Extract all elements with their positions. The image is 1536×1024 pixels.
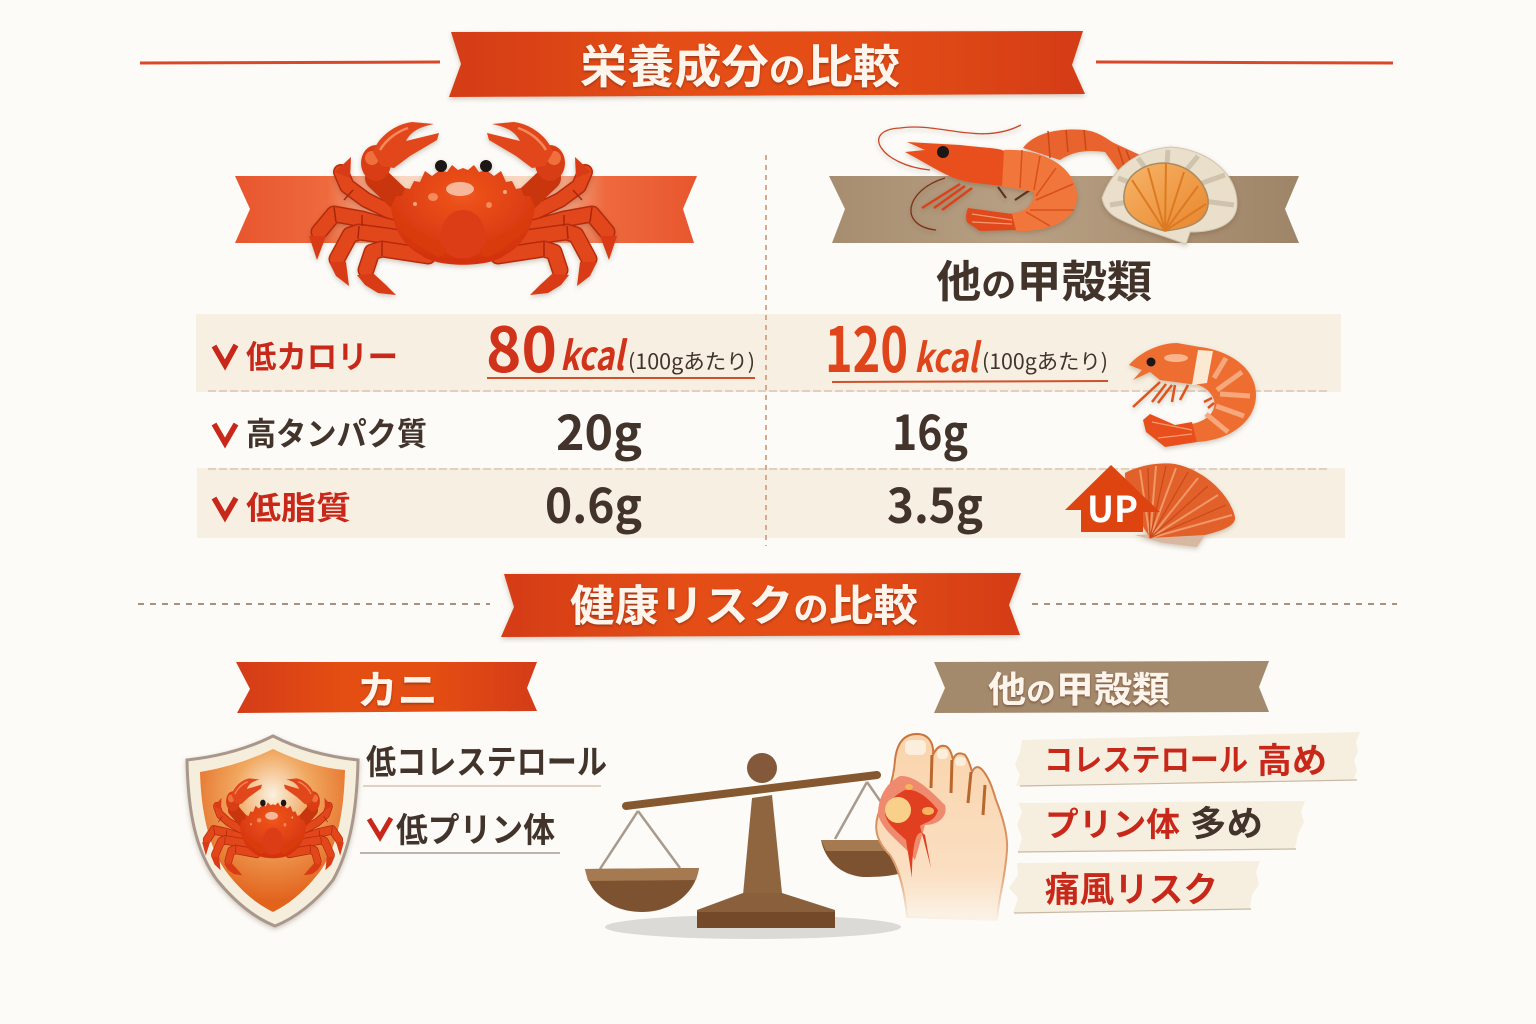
label: low calorie: 低カロリー bbox=[246, 332, 398, 378]
ribbon: crab bbox=[235, 176, 697, 243]
value: other calories bbox=[825, 300, 1108, 390]
tape: high cholesterol bbox=[1015, 732, 1360, 786]
value: other calories: 120 bbox=[825, 300, 908, 390]
value: other calories: kcal bbox=[914, 326, 982, 384]
heading: other crustaceans: 他の甲殻類 bbox=[936, 246, 1152, 310]
tape: high cholesterol: 高め bbox=[1257, 733, 1327, 784]
label: high protein: 高タンパク質 bbox=[246, 409, 427, 455]
icon: balance scale bbox=[585, 753, 905, 939]
value: crab protein: 20g bbox=[556, 394, 642, 464]
icon: large scallop bbox=[1102, 147, 1237, 244]
icon: crab shield bbox=[187, 736, 358, 926]
tape: more purine bbox=[1017, 796, 1305, 852]
check: low fat bbox=[214, 498, 236, 517]
banner: other crustaceans bbox=[934, 661, 1269, 713]
text: low purine: 低プリン体 bbox=[396, 803, 555, 852]
tape: gout risk bbox=[1009, 861, 1260, 913]
icon: large shrimp bbox=[879, 125, 1140, 231]
tape: more purine: プリン体 bbox=[1045, 798, 1180, 846]
value: other fat: 3.5g bbox=[887, 467, 983, 537]
check: high protein bbox=[214, 424, 236, 443]
text: low cholesterol: 低コレステロール bbox=[366, 735, 607, 784]
section header: nutrition comparison: 栄養成分の比較 bbox=[580, 31, 900, 97]
nutrition table bbox=[196, 155, 1345, 546]
banner: crab: カニ bbox=[357, 658, 438, 716]
row band: calories bbox=[196, 314, 1341, 392]
value: other protein: 16g bbox=[892, 394, 968, 464]
banner: crab bbox=[236, 658, 537, 716]
check: low purine bbox=[369, 818, 391, 837]
icon: up arrow: UP bbox=[1087, 481, 1138, 533]
icon: small scallop bbox=[1125, 463, 1235, 547]
value: crab calories: (100gあたり) bbox=[628, 346, 755, 376]
tape: high cholesterol: コレステロール bbox=[1044, 735, 1248, 780]
crab health list bbox=[360, 735, 607, 853]
section header: health risk comparison bbox=[138, 572, 1397, 637]
icon: inflamed foot bbox=[876, 734, 1007, 920]
ribbon: other crustaceans bbox=[829, 176, 1299, 243]
section header: nutrition comparison bbox=[140, 31, 1393, 97]
banner: other crustaceans: 他の甲殻類 bbox=[988, 661, 1170, 713]
value: crab fat: 0.6g bbox=[545, 467, 642, 537]
section header: health risk comparison: 健康リスクの比較 bbox=[570, 572, 918, 634]
value: crab calories: kcal bbox=[560, 324, 628, 382]
value: crab calories: 80 bbox=[486, 300, 557, 390]
label: low fat: 低脂質 bbox=[246, 483, 351, 529]
value: other calories: (100gあたり) bbox=[982, 346, 1108, 376]
row band: fat bbox=[197, 468, 1345, 538]
value: crab calories bbox=[486, 300, 755, 390]
icon: up arrow bbox=[1065, 465, 1160, 533]
icon: small shrimp bbox=[1129, 343, 1256, 447]
check: low calorie bbox=[214, 345, 236, 365]
tape: gout risk: 痛風リスク bbox=[1045, 862, 1218, 913]
icon: crab bbox=[309, 122, 617, 295]
tape: more purine: 多め bbox=[1190, 796, 1263, 847]
other crustaceans health list bbox=[1009, 732, 1360, 913]
